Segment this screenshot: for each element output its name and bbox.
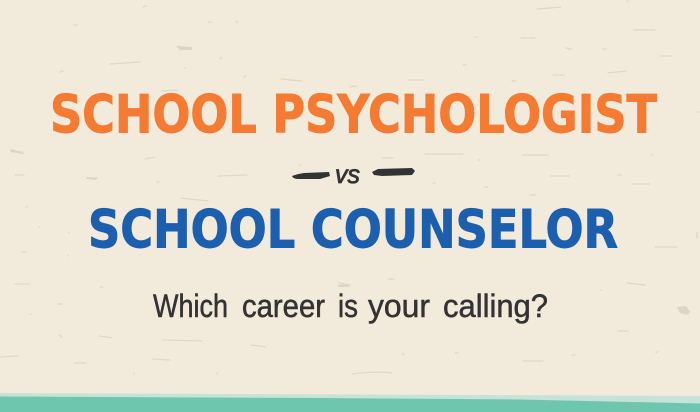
right brush stroke bbox=[372, 168, 415, 176]
subtitle: career bbox=[242, 288, 325, 324]
title: School Counselor: SCHOOL COUNSELOR bbox=[88, 200, 618, 260]
left brush stroke bbox=[292, 172, 330, 179]
subtitle: Which bbox=[153, 288, 228, 324]
subtitle: is bbox=[338, 288, 358, 324]
subtitle: your bbox=[368, 288, 430, 324]
subtitle: calling? bbox=[443, 288, 548, 324]
vs divider bbox=[292, 159, 415, 189]
vs label: vs bbox=[335, 159, 360, 189]
subtitle bbox=[153, 288, 548, 324]
teal footer band bbox=[0, 393, 700, 412]
